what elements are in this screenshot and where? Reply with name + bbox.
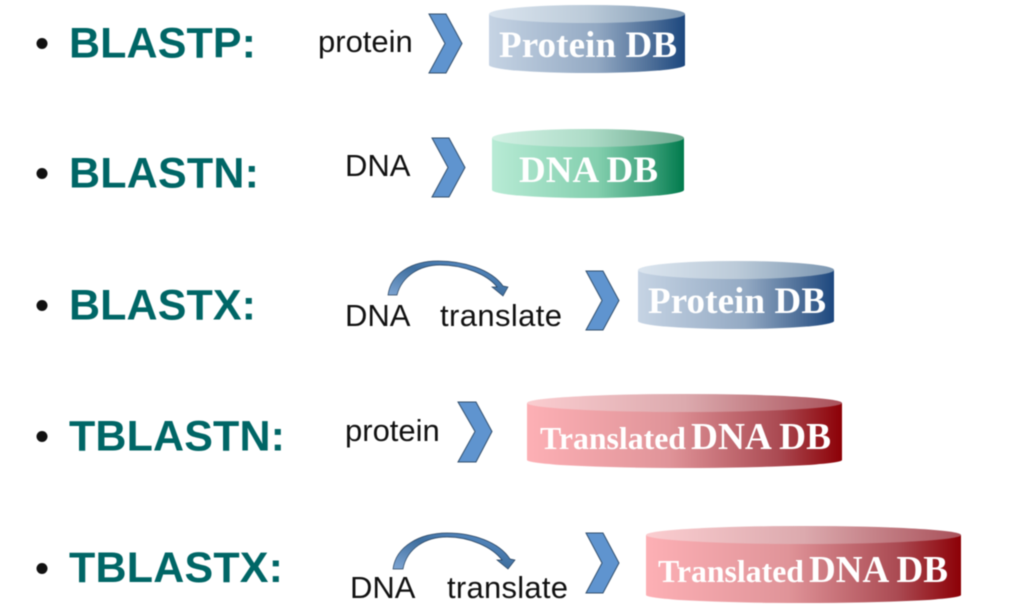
- query text: translate: translate: [440, 298, 562, 333]
- query text: DNA: DNA: [345, 298, 411, 333]
- query text: protein: protein: [318, 24, 413, 59]
- arrow: chevron: [458, 402, 492, 462]
- database: DNA DB: [492, 129, 684, 198]
- bullet: [36, 168, 48, 179]
- database: Protein DB: Protein DB: [499, 25, 677, 66]
- database: Translated DNA DB: Translated: [540, 421, 686, 456]
- arrow: chevron: [586, 533, 619, 593]
- database: Protein DB: Protein DB: [648, 281, 826, 322]
- bullet: [36, 300, 48, 311]
- database: DNA DB: DNA DB: [519, 150, 658, 191]
- label: BLASTP: BLASTP:: [69, 20, 256, 68]
- row: TBLASTX: [36, 526, 961, 605]
- database: Protein DB: [489, 5, 685, 73]
- arrow: curved translate: [388, 261, 508, 296]
- database: Translated DNA DB: [646, 526, 961, 603]
- database: Translated DNA DB: DNA DB: [691, 416, 831, 458]
- arrow: chevron: [586, 271, 619, 330]
- database: Protein DB: [638, 261, 834, 329]
- query text: translate: translate: [447, 570, 568, 605]
- query text: protein: protein: [345, 413, 440, 448]
- query text: DNA: DNA: [350, 570, 416, 605]
- row: TBLASTN: [36, 394, 842, 468]
- query text: DNA: DNA: [345, 148, 411, 183]
- label: TBLASTN: TBLASTN:: [69, 412, 285, 460]
- row: BLASTX: [36, 261, 834, 333]
- database: Translated DNA DB: DNA DB: [809, 549, 948, 591]
- arrow: chevron: [432, 138, 465, 197]
- label: BLASTN: BLASTN:: [69, 150, 259, 198]
- arrow: curved translate: [393, 533, 515, 569]
- bullet: [36, 431, 48, 442]
- arrow: chevron: [429, 14, 462, 73]
- label: TBLASTX: TBLASTX:: [69, 544, 283, 592]
- label: BLASTX: BLASTX:: [69, 282, 256, 330]
- row: BLASTN: [36, 129, 684, 198]
- bullet: [36, 38, 48, 49]
- bullet: [36, 563, 48, 574]
- row: BLASTP: [36, 5, 685, 73]
- database: Translated DNA DB: [527, 394, 842, 468]
- database: Translated DNA DB: Translated: [658, 554, 804, 589]
